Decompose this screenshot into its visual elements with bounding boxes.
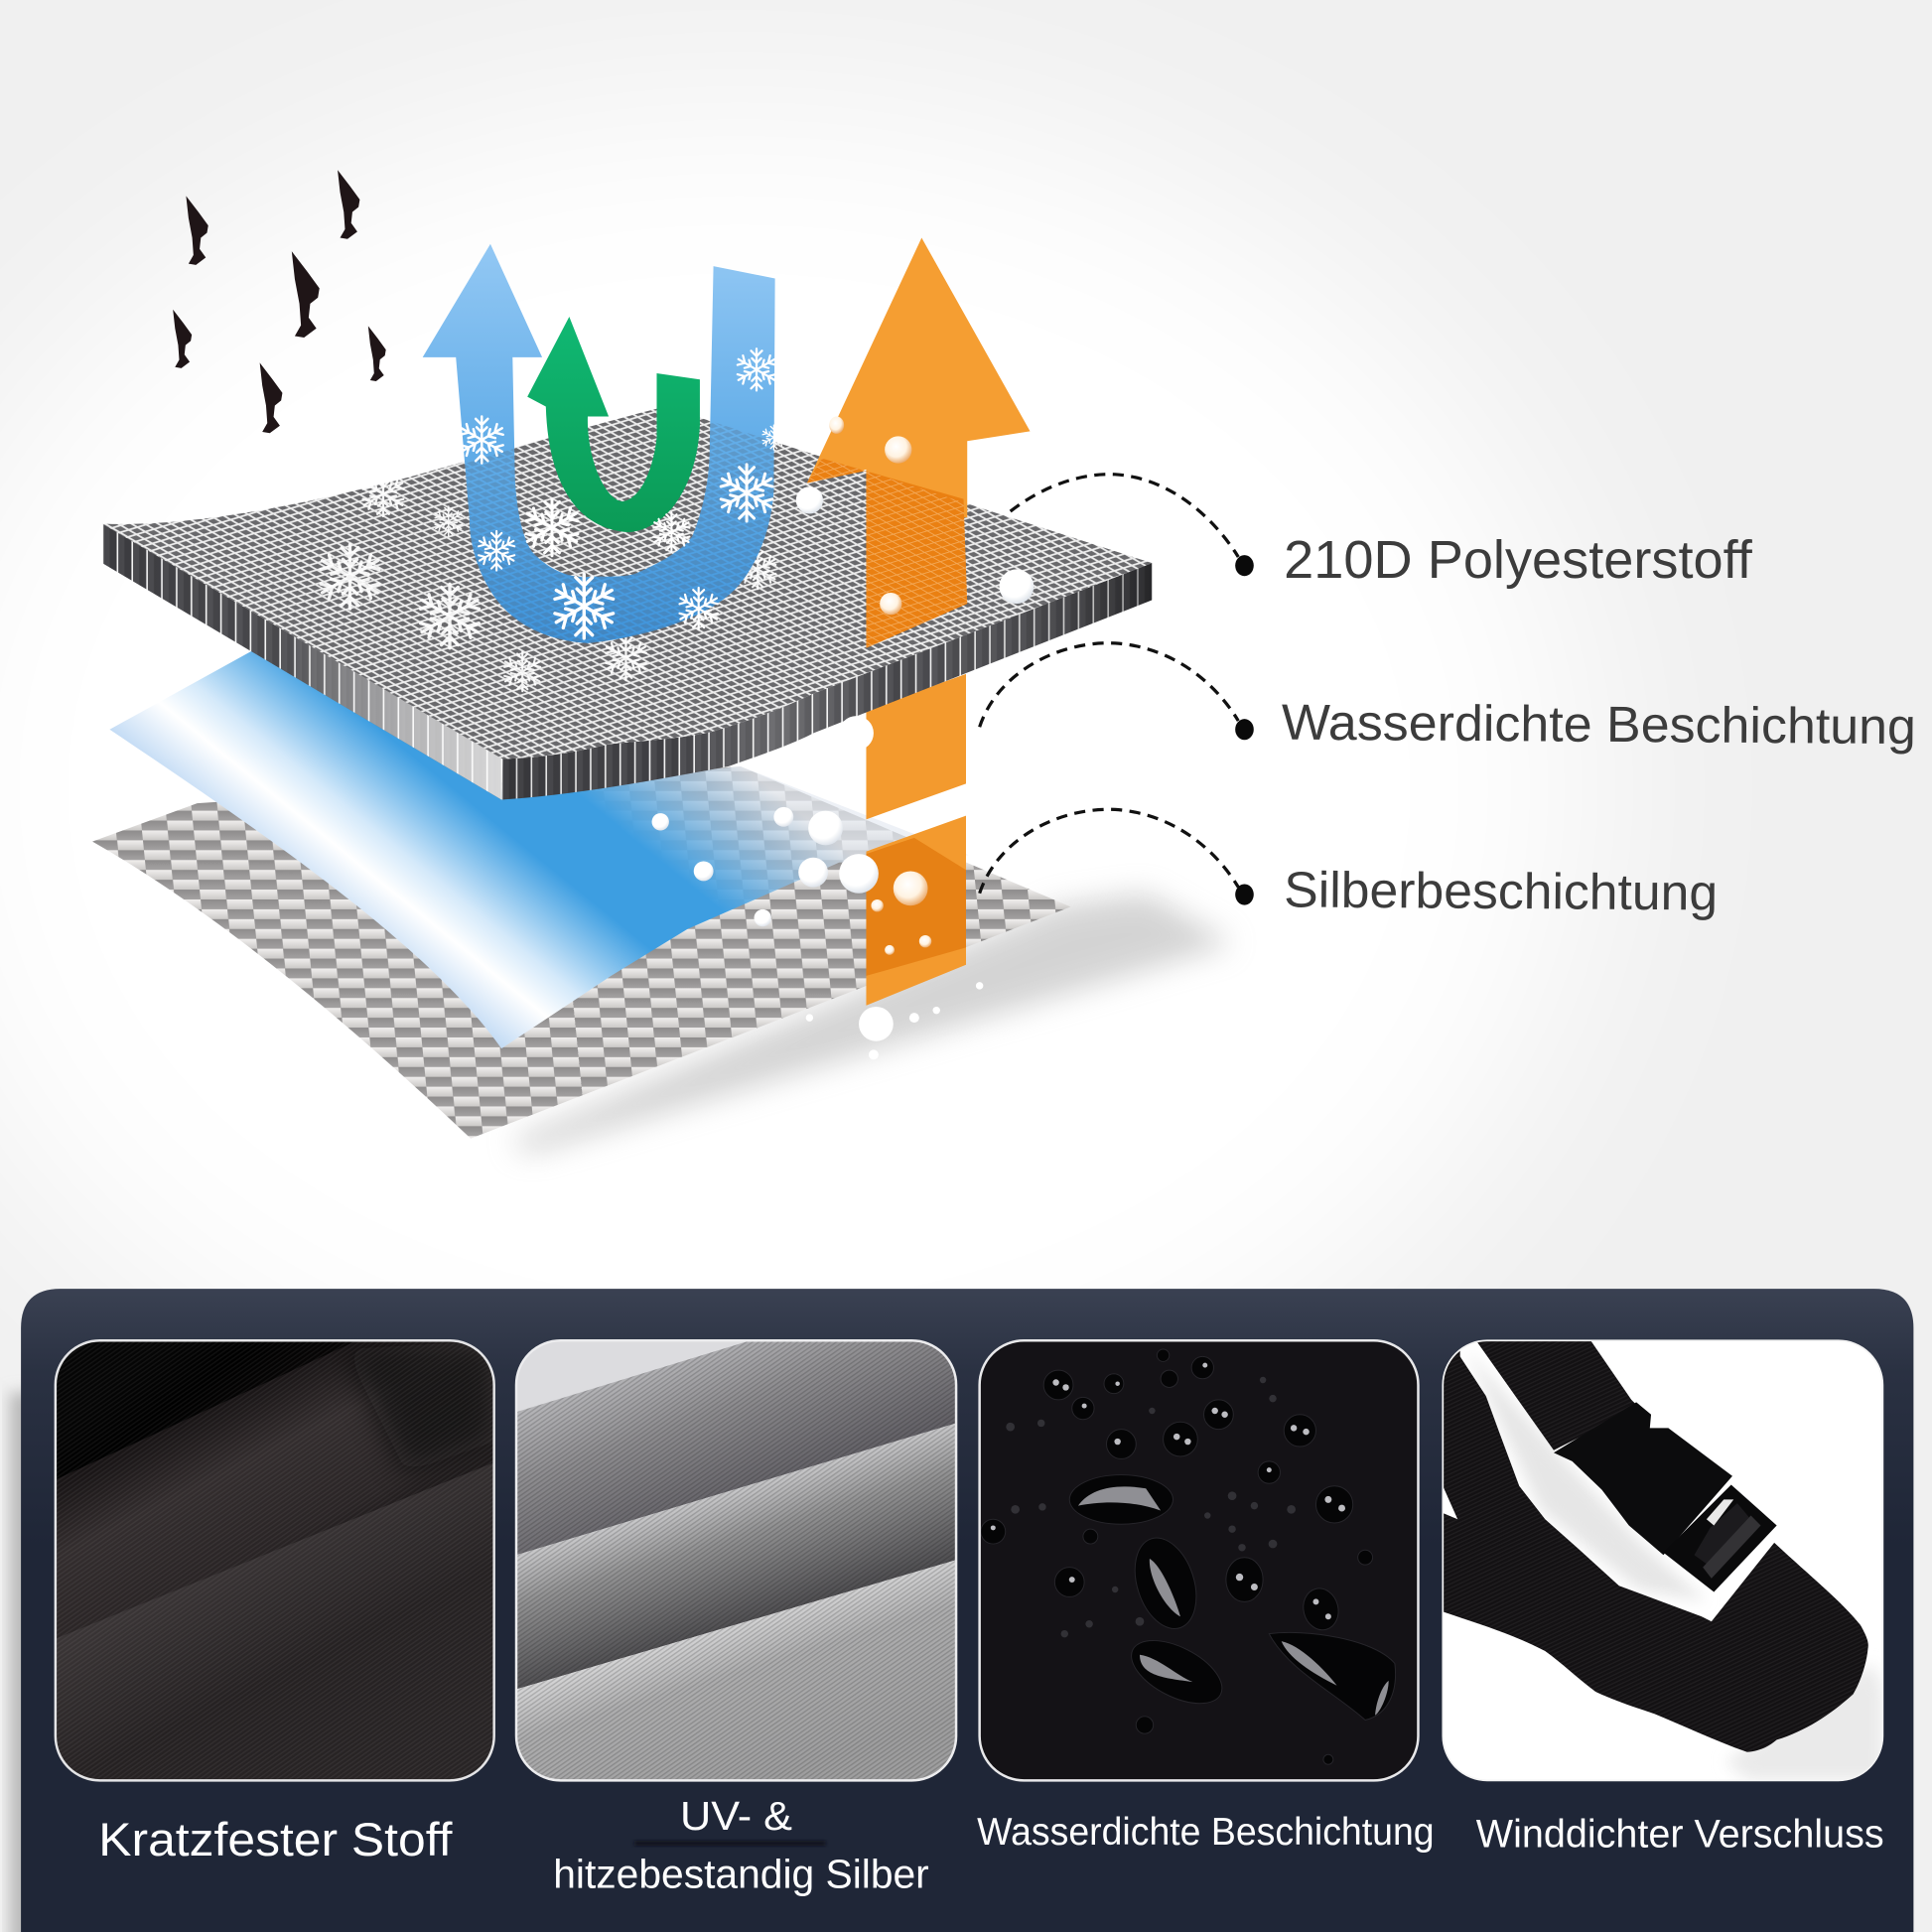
black particles [173, 170, 386, 433]
upper strap [1476, 1340, 1639, 1450]
mesh showing through blue arrow [465, 423, 774, 643]
card: water droplets [980, 1340, 1418, 1780]
caption: Winddichter Verschluss: Winddichter Verschluss [1476, 1812, 1884, 1856]
orange arrow: lower stem [866, 674, 966, 1006]
card: UV silver fabric [516, 1340, 956, 1780]
callout: Wasserdichte Beschichtung: Wasserdichte Beschichtung [1282, 694, 1916, 755]
blue U arrow [423, 244, 775, 643]
bottom sheet shadow [511, 894, 1233, 1154]
buckle [1554, 1402, 1732, 1555]
caption: UV- & hitzebestandig Silber: hitzebestandig Silber [553, 1851, 929, 1896]
top fabric right side [501, 563, 1152, 799]
lower strap [1443, 1340, 1868, 1752]
top fabric left side [102, 523, 502, 799]
blue arrow snowflakes [459, 348, 786, 638]
top fabric mesh surface [102, 407, 1152, 759]
waterproof coating layer [109, 650, 968, 1048]
caption: UV- & hitzebestandig Silber [553, 1793, 929, 1896]
green U arrow [527, 317, 700, 532]
orange arrow: head and upper stem [807, 238, 1031, 648]
caption: Kratzfester Stoff: Kratzfester Stoff [98, 1813, 453, 1865]
callout: 210D Polyesterstoff [1011, 475, 1752, 590]
layered fabric diagram [92, 238, 1233, 1154]
caption: Wasserdichte Beschichtung: Wasserdichte Beschichtung [977, 1811, 1435, 1854]
water droplets [652, 416, 1034, 1059]
callout: Silberbeschichtung: Silberbeschichtung [1284, 861, 1718, 920]
callout: Wasserdichte Beschichtung [980, 643, 1916, 755]
caption: UV- & hitzebestandig Silber: UV- & [680, 1793, 792, 1839]
panel: material features [21, 1289, 1913, 1932]
callout: Silberbeschichtung [980, 809, 1718, 920]
card: windproof buckle [1443, 1340, 1882, 1780]
faint snowflakes on fabric [318, 472, 777, 691]
callout: 210D Polyesterstoff: 210D Polyesterstoff [1284, 531, 1752, 590]
silver coating layer [92, 766, 1070, 1139]
card: scratch-resistant fabric [56, 1340, 494, 1780]
